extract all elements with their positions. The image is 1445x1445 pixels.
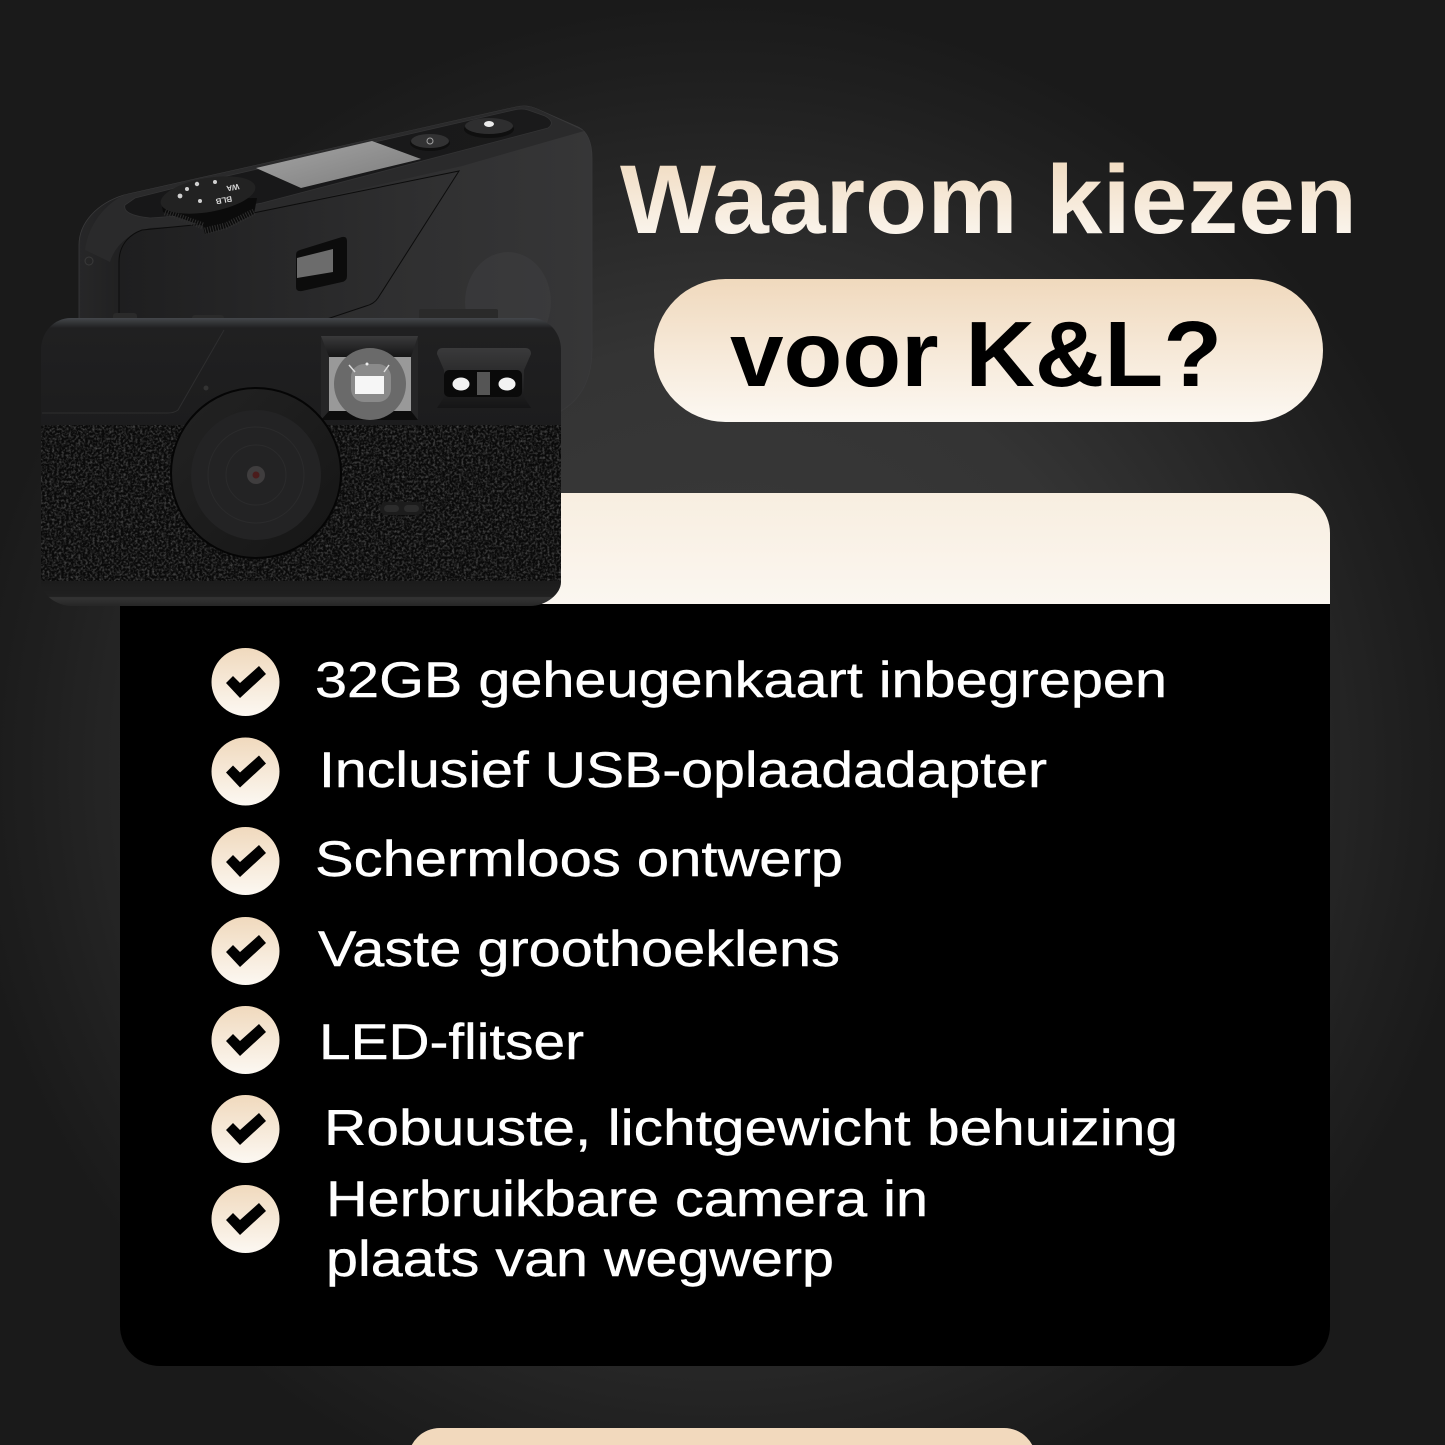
item: 32GB <box>212 648 1167 716</box>
top face <box>85 106 584 262</box>
top dial edge <box>419 309 498 321</box>
item: reusable <box>212 1171 928 1287</box>
small port <box>85 257 93 265</box>
flash housing <box>321 336 418 420</box>
item: reusable: plaats van wegwerp <box>326 1231 834 1287</box>
viewfinder <box>296 237 347 291</box>
item: housing: Robuuste, lichtgewicht behuizing <box>324 1100 1178 1156</box>
item: LED <box>212 1006 584 1074</box>
mode dial: WA <box>225 182 240 193</box>
seam line <box>42 330 224 413</box>
front panel <box>119 171 459 320</box>
power button <box>410 134 450 151</box>
mode dial: BLB <box>215 194 233 206</box>
shutter button <box>464 118 514 138</box>
item: USB <box>212 738 1047 806</box>
item: LED: LED-flitser <box>319 1014 584 1070</box>
item: 32GB: 32GB geheugenkaart inbegrepen <box>315 652 1167 708</box>
control plate <box>125 109 551 218</box>
camera back body <box>79 106 592 411</box>
illustration: camera front view <box>41 309 561 606</box>
card black body <box>120 604 1330 1366</box>
item: lens <box>212 917 840 985</box>
leather panel <box>41 425 561 581</box>
viewfinder window <box>437 348 531 408</box>
heading pill: voor K&L? <box>654 279 1323 422</box>
mode dial <box>158 170 258 234</box>
top left buttons <box>113 313 224 321</box>
item: screenless: Schermloos ontwerp <box>315 831 843 887</box>
speaker <box>380 502 423 515</box>
grip <box>465 252 551 352</box>
item: screenless <box>212 827 843 895</box>
item: reusable: Herbruikbare camera in <box>326 1171 928 1227</box>
card cream header <box>120 493 1330 610</box>
heading pill: voor K&L?: voor K&L? <box>730 302 1222 406</box>
sensor dot <box>204 386 208 390</box>
top display <box>256 141 421 188</box>
item: USB: Inclusief USB-oplaadadapter <box>319 742 1047 798</box>
lens <box>171 388 341 558</box>
feature list <box>212 648 1178 1287</box>
lower band <box>41 578 561 606</box>
item: housing <box>212 1095 1178 1163</box>
illustration: camera back view <box>79 106 592 411</box>
title: Waarom kiezen: Waarom kiezen <box>620 145 1357 254</box>
item: lens: Vaste groothoeklens <box>318 921 840 977</box>
bottom button <box>408 1428 1036 1445</box>
panel: feature card <box>120 493 1330 1366</box>
upper body <box>41 318 561 430</box>
